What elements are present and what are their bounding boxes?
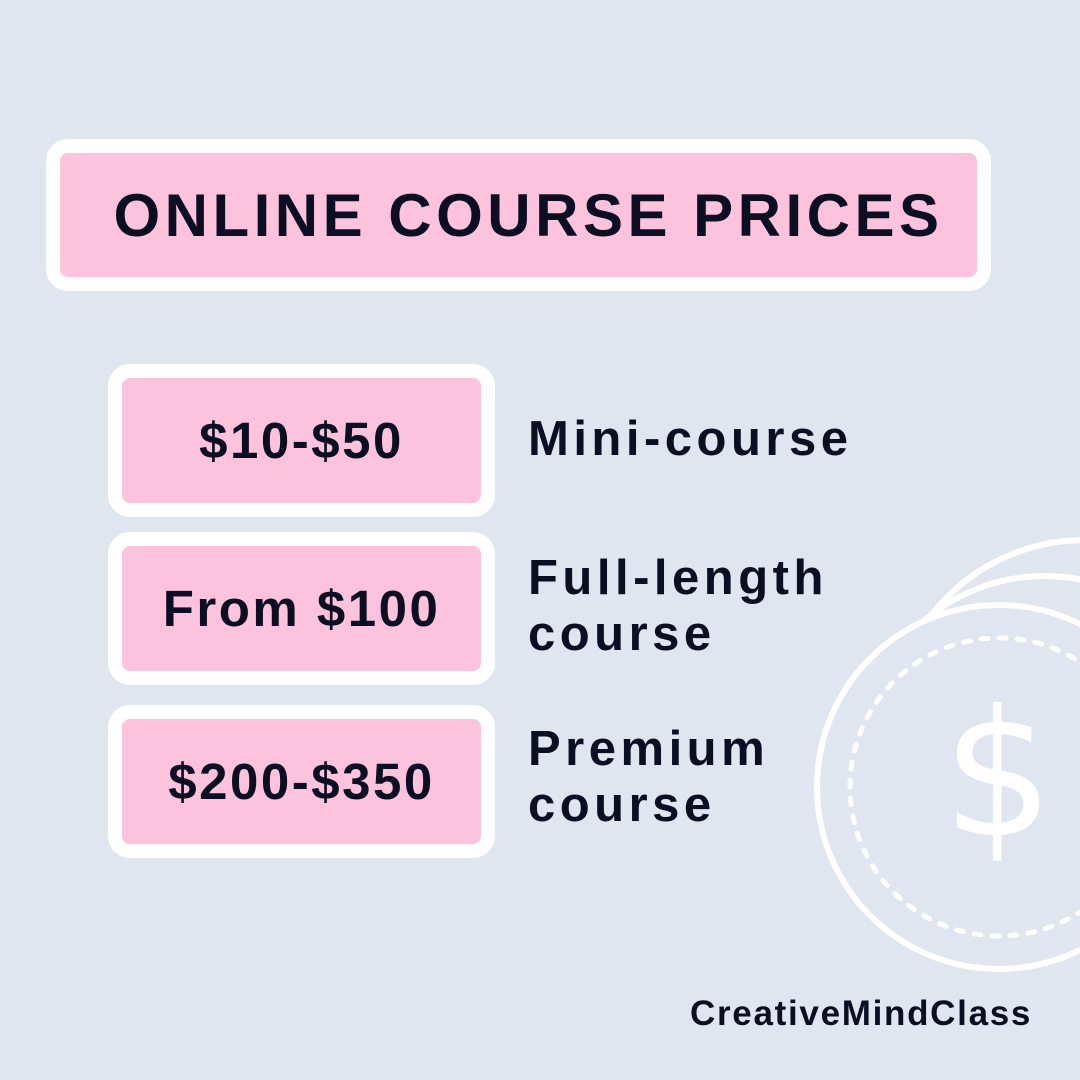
title [46,139,991,291]
label: full-length course [528,551,828,661]
label: premium course: Premium [528,722,769,776]
price: $200-$350: $200-$350 [168,753,435,810]
price: from $100: From $100 [163,580,440,637]
label: mini-course: Mini-course [528,412,852,466]
label: premium course [528,722,769,832]
price: $10-$50 [108,364,495,517]
coin icon: $ [942,674,1054,877]
brand footer: CreativeMindClass [690,994,1032,1033]
label: premium course: course [528,778,716,832]
label: full-length course: Full-length [528,551,828,605]
price: $200-$350 [108,705,495,858]
price: from $100 [108,532,495,685]
title: ONLINE COURSE PRICES [113,182,944,248]
price: $10-$50: $10-$50 [199,412,404,469]
label: full-length course: course [528,607,716,661]
